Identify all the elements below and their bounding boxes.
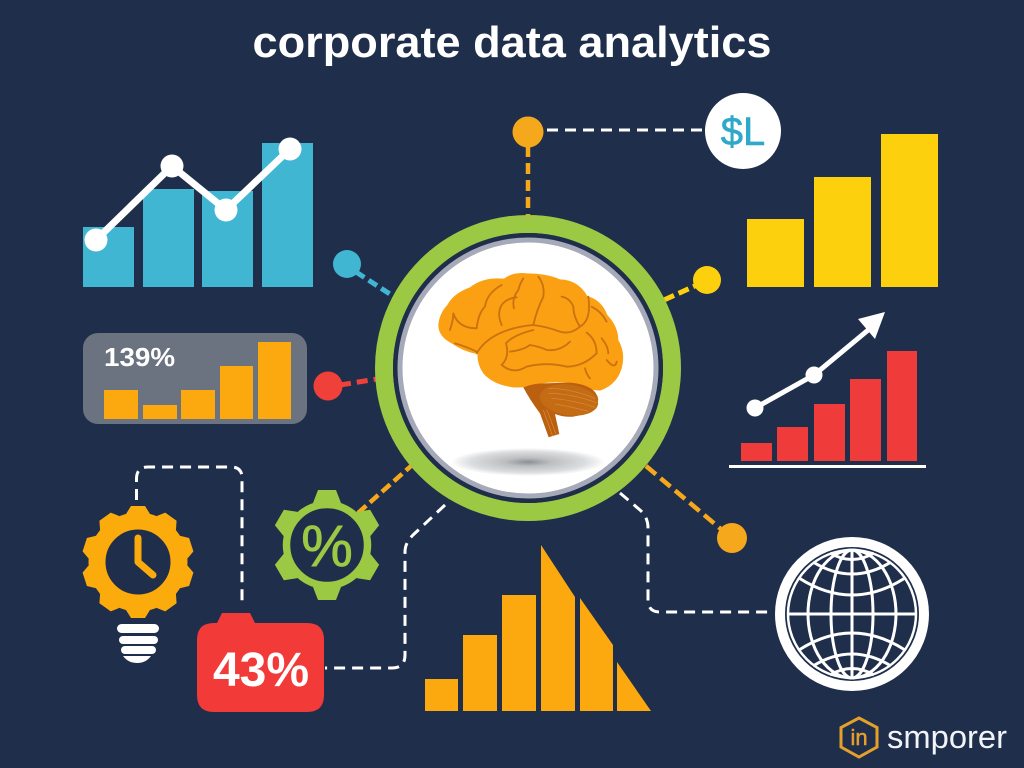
icon: brain — [438, 273, 623, 437]
logo — [841, 718, 1007, 757]
connector: yellow node — [664, 266, 721, 300]
callout: red 43% badge: 43% — [213, 644, 309, 697]
logo: smporer — [887, 719, 1007, 755]
bar chart: red with arrow — [729, 312, 926, 466]
bar chart: orange descending — [425, 545, 651, 711]
icon: globe — [780, 542, 924, 686]
connector: hub to globe — [620, 493, 768, 612]
icon: percent gear — [272, 490, 382, 600]
icon: dollar badge: $L — [721, 110, 765, 154]
connector: bulb to red badge — [136, 467, 242, 606]
connector: blue node — [333, 250, 393, 296]
bar chart: blue with line — [83, 138, 313, 287]
title: corporate data analytics — [252, 18, 772, 67]
connector: red node — [314, 372, 377, 400]
icon: percent gear: % — [301, 514, 353, 579]
bar chart: yellow — [747, 134, 938, 287]
logo: in — [850, 725, 868, 750]
callout: red 43% badge — [197, 613, 324, 712]
icon: dollar badge — [705, 93, 781, 169]
panel: orange mini chart — [83, 333, 307, 424]
connector: top orange node to hub — [512, 116, 544, 216]
shadow under brain — [451, 448, 605, 476]
connector: hub to red badge — [325, 505, 445, 668]
panel bars — [104, 342, 291, 419]
hub: brain circle — [384, 224, 672, 512]
connector: dashed line to dollar badge — [547, 128, 702, 132]
connector: gear to hub — [358, 466, 411, 513]
connector: orange node lower right — [646, 466, 747, 553]
icon: clock gear light bulb — [81, 506, 195, 663]
panel value: 139% — [104, 342, 175, 372]
